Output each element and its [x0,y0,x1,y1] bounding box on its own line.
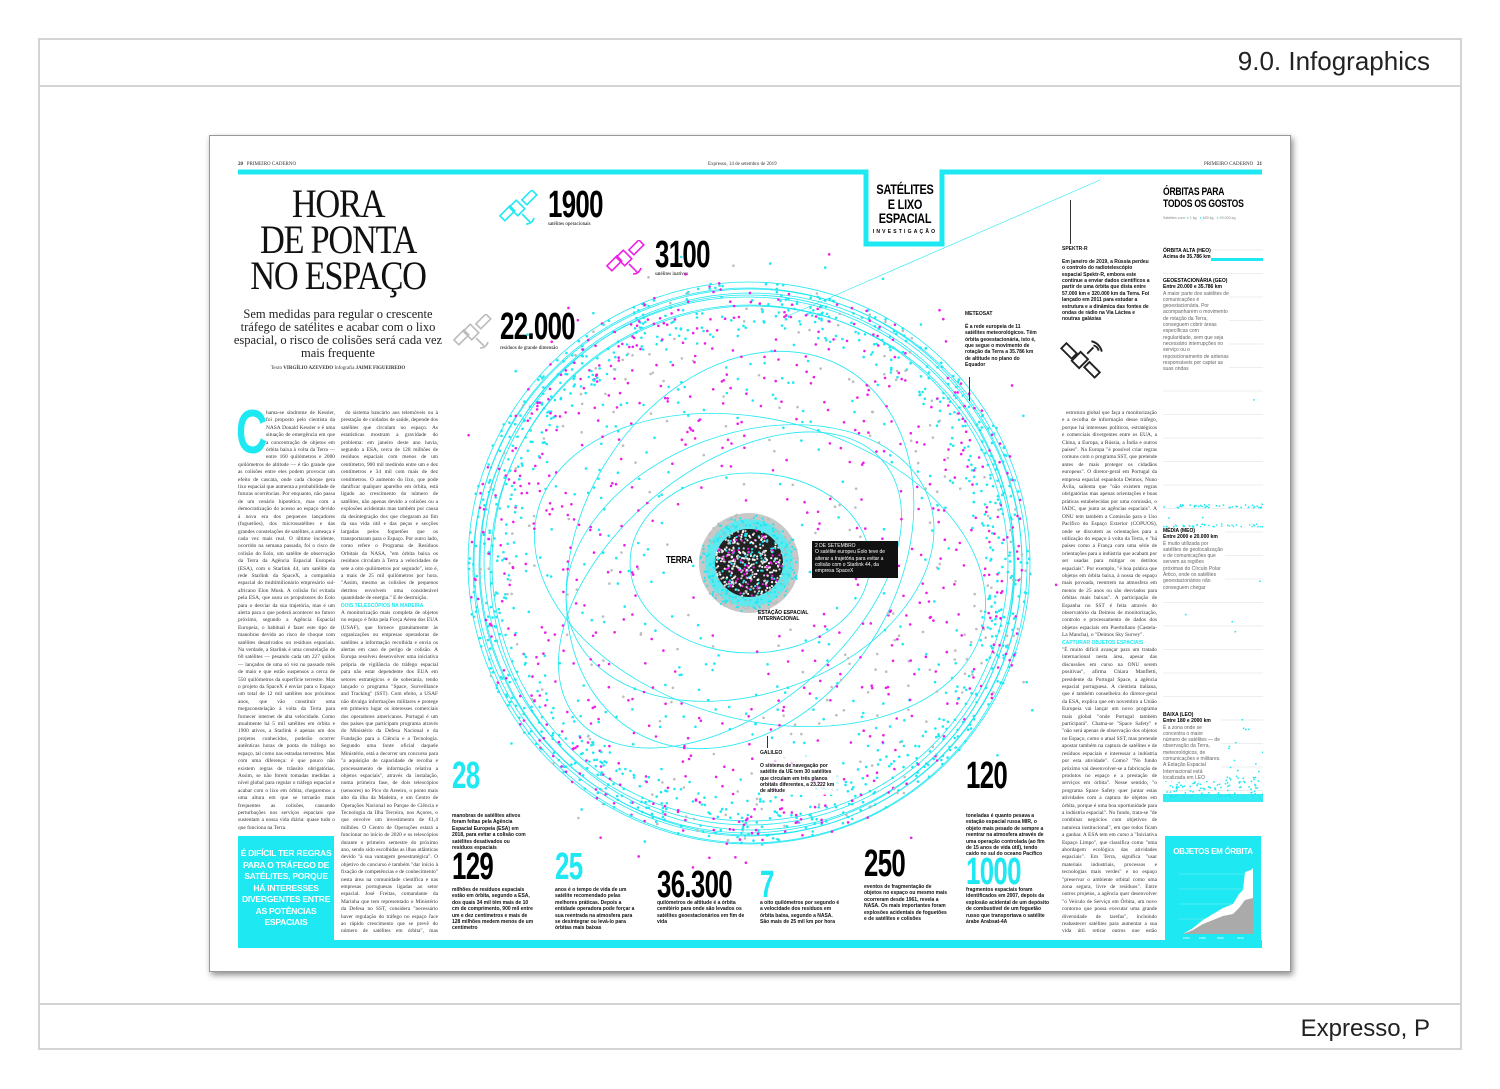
stat: 1900 operational: 1900 [548,184,603,226]
callout: ISS: INTERNACIONAL [758,616,799,622]
orbit chart [467,180,1100,869]
bottom stat: 25: anos é o tempo de vida de um satélite recomendado pelas melhores práticas. Depois a entidade operadora pode forçar a sua reentrada na atmosfera para se desintegrar ou levá-lo para órbitas mais baixas [555,887,634,931]
folio line: PRIMEIRO CADERNO 21 [1204,162,1262,167]
bottom stat: 250 [864,843,947,922]
article column 3: CAPTURAR OBJETOS ESPACIAIS [1062,640,1143,646]
bottom stat: 1000: 1000 [966,851,1021,893]
article column 2: DOIS TELESCÓPIOS NA MADEIRA [341,603,423,609]
pull quote box: É DIFÍCIL TER REGRAS PARA O TRÁFEGO DE SATÉLITES, PORQUE HÁ INTERESSES DIVERGENTES ENTRE AS POTÊNCIAS ESPACIAIS [241,848,331,927]
callout: spektr-r: Em janeiro de 2019, a Rússia perdeu o controlo do radiotelescópio espacial Spektr-R, embora este continue a enviar dados científicos a partir de uma órbita que dista entre 57.000 km e 320.000 km da Terra. Foi lançado em 2011 para estudar a estrutura e a dinâmica das fontes de ondas de rádio na Via Láctea e noutras galáxias [1062,259,1150,322]
stat: 22000 debris: resíduos de grande dimensão [500,346,558,351]
section tag: INVESTIGAÇÃO [873,228,937,234]
bottom stat: 28: manobras de satélites ativos foram feitas pela Agência Espacial Europeia (ESA) em 2018, para evitar a colisão com satélites desativados ou resíduos espaciais [452,813,526,851]
area chart: 1980 [1199,936,1206,940]
section tag [873,181,937,234]
bottom stat: 1000 [966,851,1049,925]
article column 2 [341,410,438,934]
bottom stat: 250: 250 [864,843,905,885]
icon: cyan satellite [498,190,538,225]
callout: ISS: ESTAÇÃO ESPACIAL [758,610,808,616]
bottom stat: 28: 28 [452,755,479,797]
pull quote box [238,836,334,948]
subtitle: Sem medidas para regular o crescente tráfego de satélites e acabar com o lixo espacial, o risco de colisões será cada vez mais frequente [234,307,442,360]
bottom stat: 25 [555,846,634,931]
earth [699,513,799,613]
callout: spektr-r [1062,200,1150,322]
HEO text [1163,248,1211,261]
callout: meteosat: É a rede europeia de 11 satélites meteorológicos. Têm órbita geoestacionária, isto é, que segue o movimento de rotação da Terra a 35.786 km de altitude no plano do Equador [965,324,1037,368]
sidebar: orbits for all tastes [1163,185,1263,802]
header label: 9.0. Infographics [1238,46,1430,76]
stat: 22000 debris: 22.000 [500,306,575,348]
article column 2: do sistema bancário aos telemóveis ou à prestação de cuidados de saúde, depende dos satélites que circulam no espaço. As estatísticas mostram a gravidade do problema: em janeiro deste ano havia, segundo a ESA, cerca de 128 milhões de resíduos espaciais com menos de um centímetro, 900 mil medindo entre um e dez centímetros e 34 mil com mais de dez centímetros. O aumento do lixo, que pode danificar qualquer aparelho em órbita, está ligado ao crescimento do número de satélites, não apenas devido a colisões ou a explosões acidentais mas também por causa da desintegração dos que chegaram ao fim da sua vida útil e das peças e secções largadas pelos foguetões que os transportaram para o Espaço. Por outro lado, como refere o Programa de Resíduos Orbitais da NASA, "em órbita baixa os resíduos circulam à Terra a velocidades de sete a oito quilómetros por segundo", isto é, a mais de 25 mil quilómetros por hora. "Assim, mesmo as colisões de pequenos detritos envolvem uma considerável quantidade de energia." E de destruição. [341,410,438,601]
folio line [238,162,1262,167]
callout: meteosat [965,311,1037,401]
title: DE PONTA [260,217,416,262]
callout: spektr-r: SPEKTR-R [1062,246,1088,252]
legend: Satélites com: ● 1 kg ● 500 kg ● 20.000 kg [1163,216,1235,220]
bottom stat: 129: milhões de resíduos espaciais estão em órbita, segundo a ESA, dos quais 34 mil têm mais de 10 cm de comprimento, 900 mil entre um e dez centímetros e mais de 128 milhões medem menos de um centímetro [452,887,533,931]
sidebar title [1163,185,1244,210]
bottom stat: 36300: quilómetros de altitude é a órbita cemitério para onde são levados os satélites geoestacionários em fim de vida [657,900,744,925]
HEO text: Acima de 35.786 km [1163,254,1211,260]
LEO text: É a zona onde se concentra o maior número de satélites — de observação da Terra, meteorológicos, de comunicações e militares. A Estação Espacial Internacional está localizada em LEO [1163,725,1221,781]
area chart: 2000 [1217,936,1224,940]
article column 3 [1062,410,1157,932]
sidebar title: ÓRBITAS PARA [1163,186,1224,198]
bottom stat: 25: 25 [555,846,582,888]
GEO text: GEOESTACIONÁRIA (GEO) [1163,278,1227,284]
bottom stat: 28 [452,755,526,851]
stat: 22000 debris [452,306,575,351]
GEO text: Entre 20.000 e 35.786 km [1163,284,1222,290]
title: HORA [292,181,384,226]
section tag: SATÉLITES [876,181,934,197]
bottom stat: 129: 129 [452,846,493,888]
HEO text: ÓRBITA ALTA (HEO) [1163,248,1211,254]
bottom stat: 120: toneladas é quanto pesava a estação espacial russa MIR, o objeto mais pesado de sempre a reentrar na atmosfera através de uma operação controlada (ao fim de 15 anos de vida útil), tendo caído no sul do oceano Pacífico [966,813,1045,857]
stat: 1900 operational: satélites operacionais [548,222,591,227]
LEO text: Entre 180 e 2000 km [1163,718,1211,724]
section tag: ESPACIAL [879,210,931,226]
objects in orbit chart: OBJETOS EM ÓRBITA [1173,847,1253,856]
callout: 2 de setembro [812,541,898,578]
LEO text: BAIXA (LEO) [1163,712,1193,718]
bottom stat: 129 [452,846,533,931]
section tag: E LIXO [888,196,922,212]
bottom stat: 250: eventos de fragmentação de objetos no espaço ou mesmo mais ocorreram desde 1961, revela a NASA. Os mais importantes foram explosões acidentais de foguetões e de satélites e colisões [864,884,947,922]
stat: 3100 inactive [606,234,710,277]
callout: galileo: O sistema de navegação por satélite da UE tem 30 satélites que circulam em três planos orbitais diferentes, a 23.222 km de altitude [760,763,834,794]
callout: meteosat: METEOSAT [965,311,992,317]
callout: 2 de setembro: 2 DE SETEMBRO [815,543,856,549]
icon: black satellite [1060,340,1103,379]
stat: 3100 inactive: 3100 [655,234,710,276]
byline: Texto VIRGÍLIO AZEVEDO Infografia JAIME FIGUEIREDO [271,366,405,371]
title: NO ESPAÇO [250,253,426,298]
bottom stat: 7 [760,864,839,925]
MEO text: Entre 2000 e 20.000 km [1163,534,1218,540]
bottom cyan rule [238,940,1262,948]
callout: galileo [760,750,840,795]
bottom stat: 120: 120 [966,755,1007,797]
bottom stat: 36300 [657,864,744,925]
GEO text: A maior parte dos satélites de comunicações é geoestacionária. Por acompanharem o movimento de rotação da Terra, conseguem cobrir áreas específicas com regularidade, sem que seja necessário interrupções no serviço ou o reposicionamento de antenas responsáveis por captar as suas ondas [1163,291,1229,372]
MEO text: É muito utilizada por satélites de geolocalização e de comunicações que servem as regiões próximas do Círculo Polar Ártico, onde os satélites geoestacionários não conseguem chegar [1163,541,1223,591]
area chart: 2019 [1237,936,1244,940]
callout: ISS [758,609,808,622]
area chart [1179,868,1253,940]
bottom stat: 36300: 36.300 [657,864,732,906]
stat: 3100 inactive: satélites inativos [655,272,688,277]
bottom stat: 1000: fragmentos espaciais foram identificados em 2007, depois da explosão acidental de um depósito de combustível de um foguetão russo que transportava o satélite árabe Arabsat-4A [966,887,1049,925]
callout: 2 de setembro: O satélite europeu Éolo teve de alterar a trajetória para evitar a colisão com o Starlink 44, da empresa SpaceX [815,549,885,574]
folio line: 20 PRIMEIRO CADERNO [238,162,296,167]
top cyan rule with section box [238,170,1262,246]
icon: grey satellite [452,314,492,349]
bottom stat: 7: a oito quilómetros por segundo é a velocidade dos resíduos em órbita baixa, segundo a NASA. São mais de 25 mil km por hora [760,900,839,925]
title [250,181,426,298]
bottom stat: 7: 7 [760,864,774,906]
article column 3: estrutura global que faça a monitorização e a recolha de informação desse tráfego, porque há interesses políticos, estratégicos e comerciais divergentes entre os EUA, a China, a Europa, a Rússia, a Índia e outros países". Na Europa "é possível criar regras comuns com o programa SST, que pretende antes de mais proteger os cidadãos europeus". O diretor-geral em Portugal da empresa espacial espanhola Deimos, Nuno Ávila, salienta que "não existem regras obrigatórias mas apenas orientações e boas práticas estabelecidas por uma comissão, o IADC, que junta as agências espaciais". A ONU tem também a Comissão para o Uso Pacífico do Espaço Exterior (COPUOS), onde se discutem as orientações para a utilização do espaço à volta da Terra, e "há países como a França com uma série de orientações para a indústria que acabam por ser usadas para mitigar os detritos espaciais". Por exemplo, "é boa prática que objetos em órbita baixa, à nossa do espaço mais povoada, reentrem na atmosfera em menos de 25 anos ou são desviados para órbitas mais baixas". A participação de Espanha no SST é feita através do observatório da Deimos de monitorização, controlo e processamento de dados dos objetos espaciais em Puertollano (Castela-La Mancha), o "Deimos Sky Survey". [1062,410,1157,638]
folio line: Expresso, 14 de setembro de 2019 [708,162,777,167]
altitude strip chart [1163,250,1263,802]
article column 1: hama-se síndrome de Kessler, foi proposto pelo cientista da NASA Donald Kessler e é uma situação de emergência em que a concentração de objetos em órbita baixa à volta da Terra — entre 160 quilómetros e 2000 quilómetros de altitude — é tão grande que as colisões entre eles podem provocar um efeito de cascata, onde cada choque gera lixo espacial que aumenta a probabilidade de futuras ocorrências. Por enquanto, não passa de um cenário hipotético, mas com a democratização do acesso ao espaço devido à nova era dos pequenos lançadores (foguetões), dos microssatélites e das grandes constelações de satélites, a ameaça é cada vez mais real. O último incidente, ocorrido na semana passada, foi o risco de colisão do Eolo, um satélite de observação da Terra da Agência Espacial Europeia (ESA), com o Starlink 44, um satélite da rede Starlink da SpaceX, a companhia espacial do multimilionário empresário sul-africano Elon Musk. A colisão foi evitada pela ESA, que usou os propulsores do Eolo para o desviar da sua trajetória, mas é um alerta para o que poderá acontecer no futuro próximo, segundo a Agência Espacial Europeia, o habitual é fazer este tipo de manobras devido ao risco de choque com satélites desativados ou resíduos espaciais. Na verdade, a Starlink é uma constelação de 60 satélites — pesando cada um 227 quilos — lançados de uma só vez no passado mês de maio e que estão suspensos a cerca de 550 quilómetros da superfície terrestre. Mas o projeto da SpaceX é enviar para o Espaço um total de 12 mil satélites nos próximos anos, que vão constituir uma megaconstelação à volta da Terra para fornecer internet de alta velocidade. Como atualmente há 5 mil satélites em órbita e 1900 ativos, a Starlink é apenas um dos projetos conhecidos, poderão ocorrer autênticas horas de ponta do tráfego no espaço, tal como nas estradas terrestres. Mas com uma diferença: é que pouco não existem regras de trânsito obrigatórias. Assim, se não forem tomadas medidas a nível global para regular o tráfego espacial e acabar com o lixo em órbita, chegaremos a uma altura em que se tornarão mais frequentes as colisões, causando perturbações nos serviços espaciais que sustentam a nossa vida diária: quase tudo o que funciona na Terra. [238,410,335,831]
area chart: 1960 [1183,936,1190,940]
icon: magenta satellite [606,240,645,275]
drop cap: C [236,398,267,467]
article column 2: A monitorização mais completa de objetos no espaço é feita pela Força Aérea dos EUA (USAF), que fornece gratuitamente às organizações ou empresas operadoras de satélites a informação recolhida e envia os alertas em caso de perigo de colisão. A Europa resolveu desenvolver uma iniciativa própria de vigilância do tráfego espacial para não estar dependente dos EUA em setores estratégicos e de soberania, tendo lançado o programa "Space, Surveillance and Tracking" (SST). Com efeito, a USAF não divulga informações militares e protege em primeiro lugar os interesses comerciais dos operadores americanos. Portugal é um dos países que participam programa através do Ministério da Defesa Nacional e da Fundação para a Ciência e a Tecnologia. Segundo uma fonte oficial daquele Ministério, está a decorrer um concurso para "a aquisição de capacidade de recolha e processamento de informação relativa a objetos espaciais", através da instalação, numa primeira fase, de dois telescópios (sensores) no Pico do Areeiro, o ponto mais alto da ilha da Madeira, e um Centro de Operações Nacional no Parque de Ciência e Tecnologia da Ilha Terceira, nos Açores, o que envolve um investimento de €1,4 milhões. O Centro de Operações estará a funcionar no início de 2020 e os telescópios durante o primeiro semestre do próximo ano, sendo sido escolhidas as ilhas atlânticas devido "à sua vantagem geoestratégica". O objetivo do concurso é também "dar início à fixação de competências e de conhecimento" nesta área na comunidade científica e nas empresas portuguesas ligadas ao setor espacial. José Freitas, comandante da Marinha que tem representado o Ministério da Defesa no SST, considera "necessário haver regulação do tráfego no espaço face ao rápido crescimento que se prevê do número de satélites em órbita", mas reconhece que "não é fácil criar uma [341,610,438,934]
stat: 1900 operational [498,184,603,227]
newspaper spread [209,135,1291,972]
label: terra: TERRA [666,555,692,566]
objects in orbit chart [1165,836,1261,948]
footer label: Expresso, P [1301,1015,1430,1042]
bottom stat: 120 [966,755,1045,857]
callout: galileo: GALILEO [760,750,782,756]
MEO text: MÉDIA (MEO) [1163,528,1195,534]
sidebar title: TODOS OS GOSTOS [1163,198,1244,210]
